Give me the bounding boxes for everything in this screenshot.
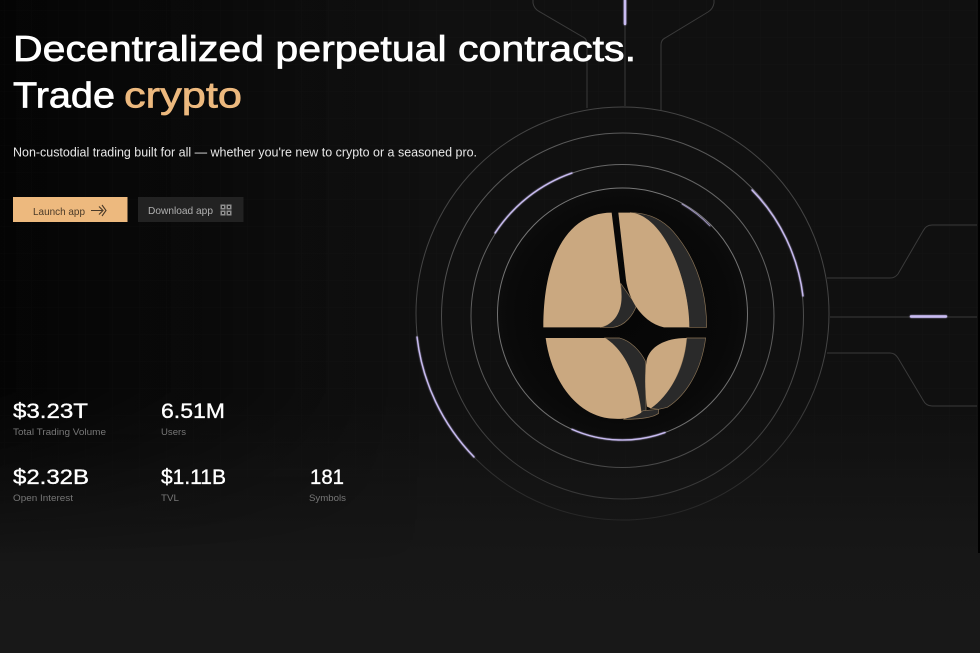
stat: open interest xyxy=(13,465,89,504)
stat: users: Users xyxy=(161,427,186,438)
stat: users xyxy=(161,399,225,438)
stat: total trading volume: $3.23T xyxy=(13,399,88,423)
stat: TVL xyxy=(161,465,226,504)
title: Trade xyxy=(13,74,115,116)
concentric rings xyxy=(416,107,829,520)
button: launch app: Launch app xyxy=(33,206,85,218)
icon: arrow xyxy=(91,205,106,216)
logo: tan segments xyxy=(543,213,689,419)
title: Decentralized perpetual contracts. xyxy=(13,28,636,69)
stat: open interest: Open Interest xyxy=(13,493,73,504)
button: launch app xyxy=(13,197,128,222)
icon: QR code xyxy=(220,204,232,216)
logo: dark extrusion xyxy=(600,213,707,419)
glowing purple accents xyxy=(417,0,946,457)
connector lines: top xyxy=(533,0,714,110)
button: download app xyxy=(138,197,244,222)
stat: TVL: TVL xyxy=(161,493,179,504)
button: download app: Download app xyxy=(148,205,213,217)
stat: TVL: $1.11B xyxy=(161,465,226,489)
stat: open interest: $2.32B xyxy=(13,465,89,489)
stat: symbols: 181 xyxy=(310,465,344,489)
title: crypto xyxy=(124,74,242,116)
central logo: split bean xyxy=(543,213,707,419)
stat: total trading volume xyxy=(13,399,106,438)
connector lines: right xyxy=(827,225,977,406)
stat: symbols xyxy=(309,465,346,504)
stat: symbols: Symbols xyxy=(309,493,346,504)
title xyxy=(13,28,636,116)
stat: total trading volume: Total Trading Volume xyxy=(13,427,106,438)
subtitle: Non-custodial trading built for all — whether you're new to crypto or a seasoned pro. xyxy=(13,146,477,160)
stat: users: 6.51M xyxy=(161,399,225,423)
